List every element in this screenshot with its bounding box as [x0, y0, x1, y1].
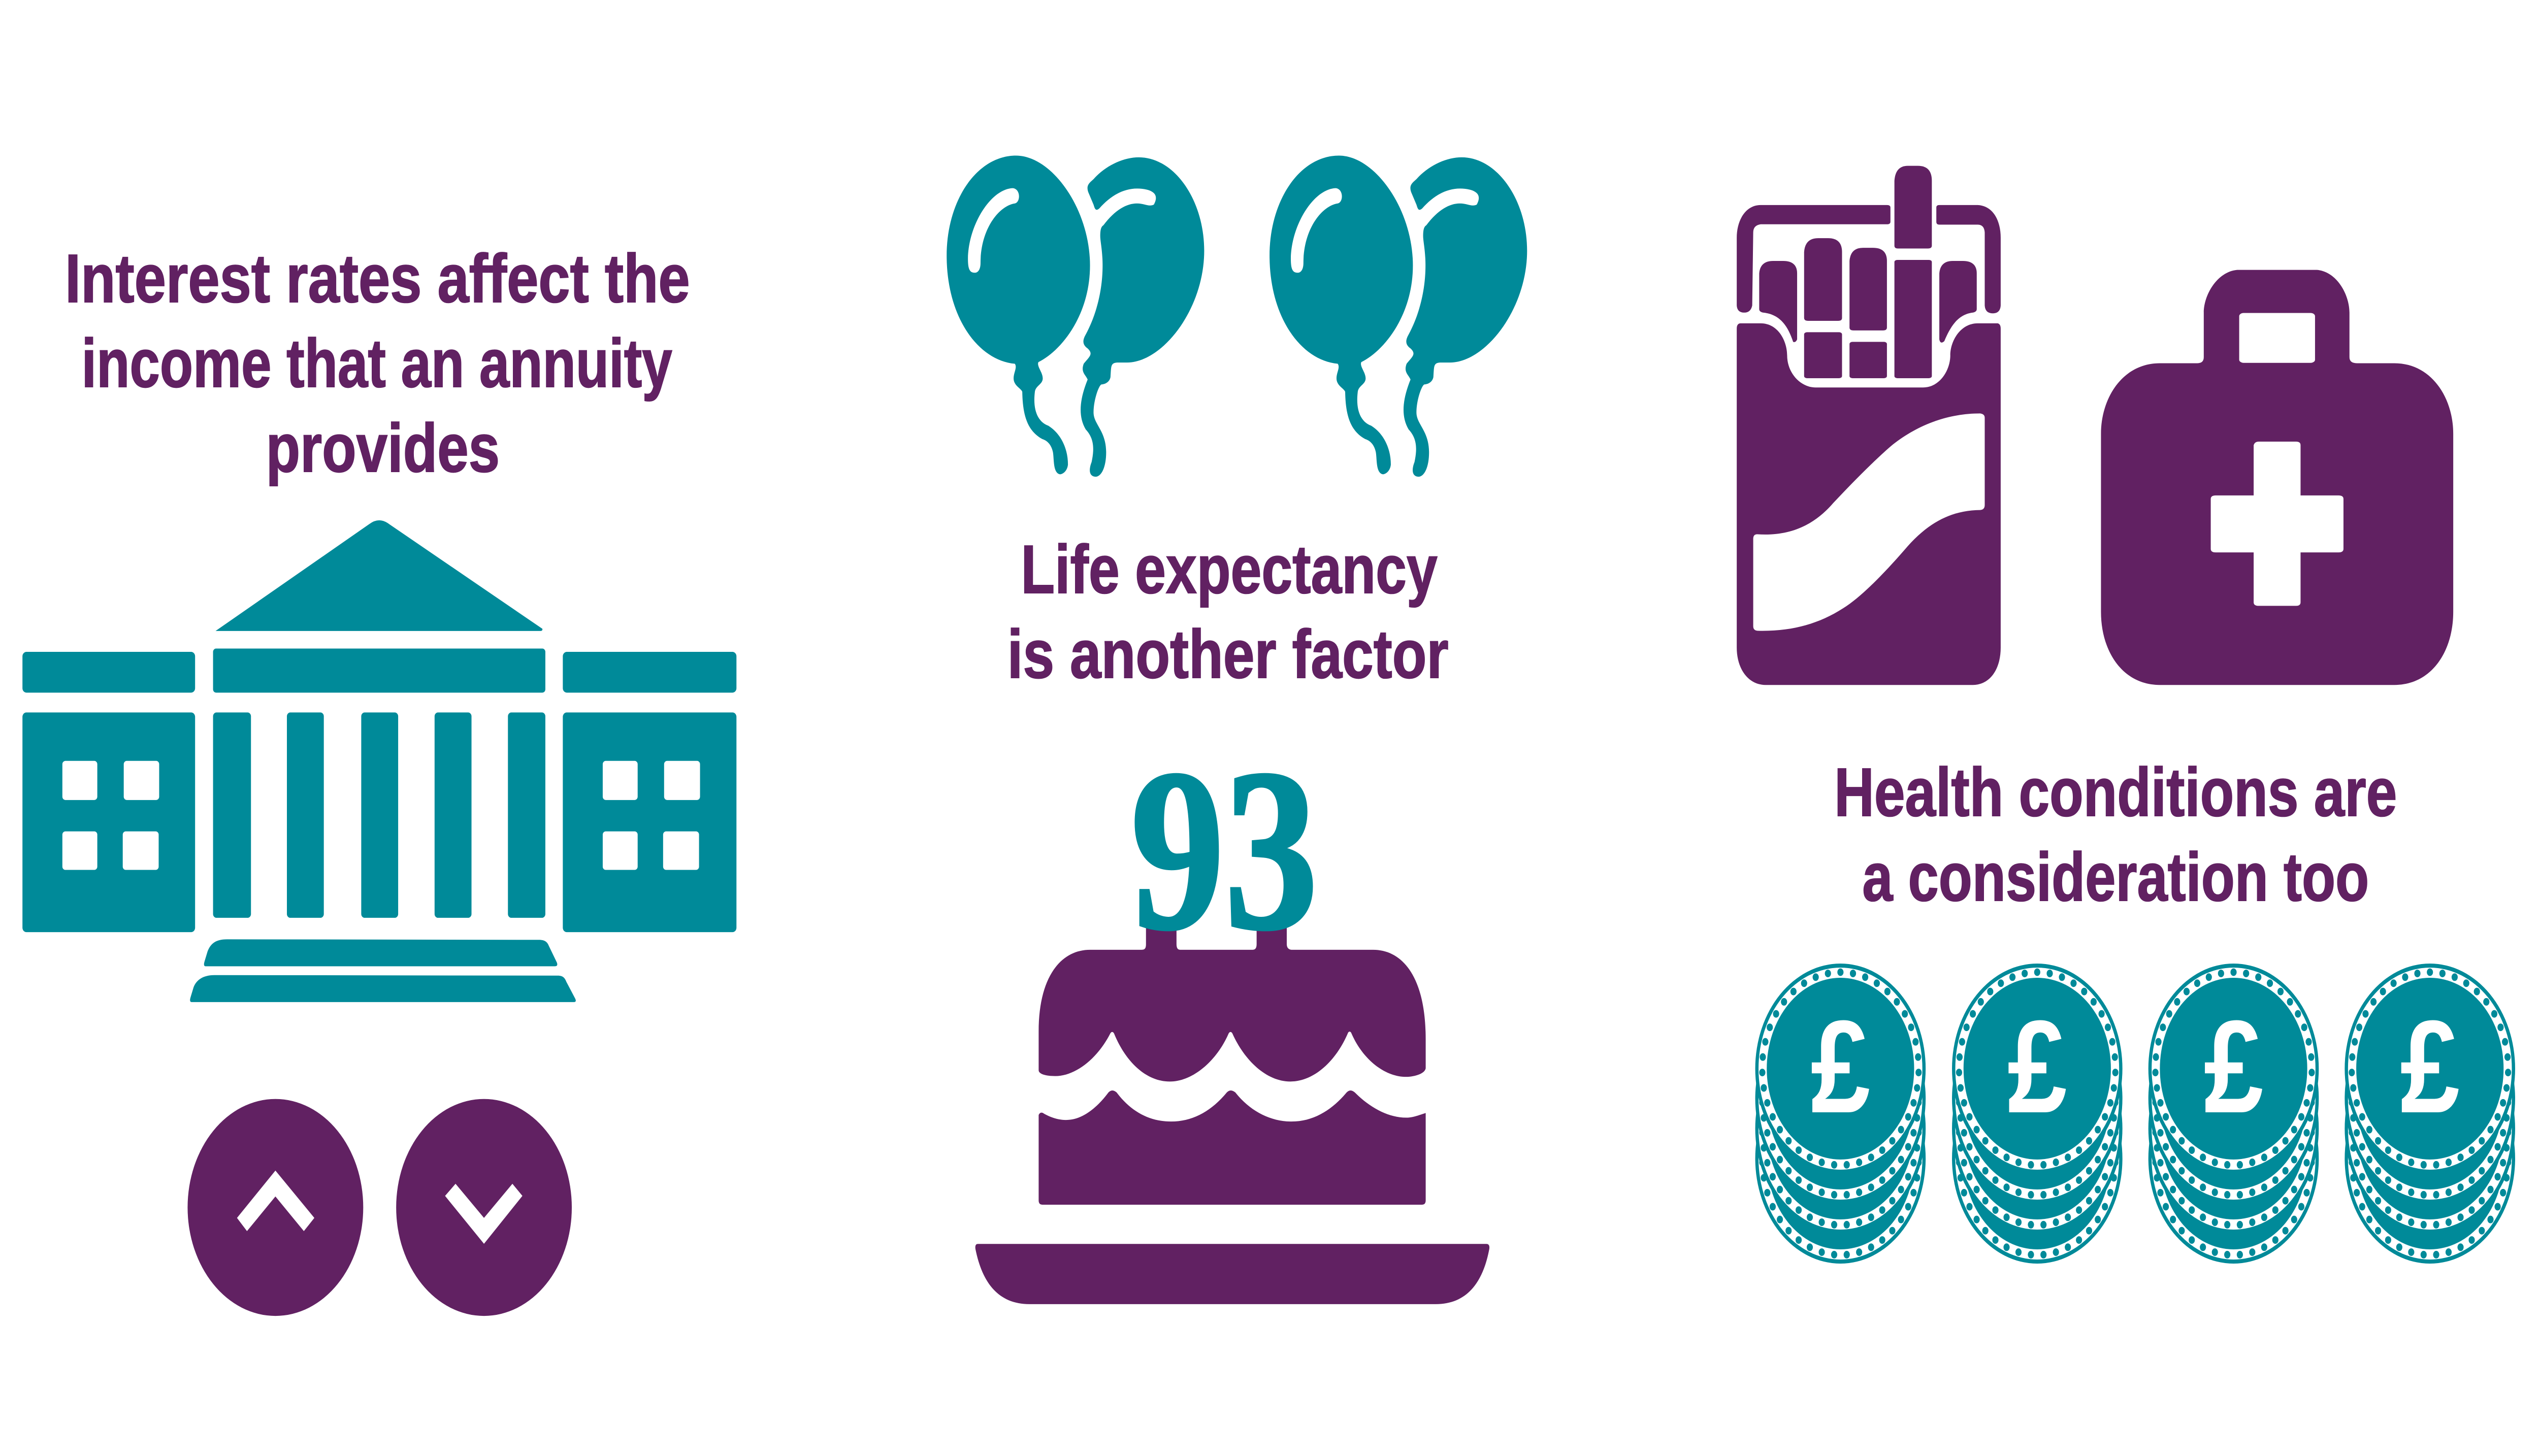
number: age 93: 93	[1131, 722, 1318, 978]
heading: health conditions: Health conditions are	[1834, 754, 2397, 831]
icon: birthday cake	[975, 915, 1489, 1304]
heading: health conditions	[1834, 754, 2397, 916]
icon: cigarette pack	[1737, 166, 2001, 685]
icon: balloons right pair	[1270, 155, 1527, 477]
icon: coin stack 1	[1755, 964, 1926, 1264]
heading: life expectancy: Life expectancy	[1021, 532, 1438, 608]
icon: coin stack 2: £	[2007, 994, 2067, 1141]
heading: life expectancy: is another factor	[1007, 616, 1449, 693]
heading: interest rates: Interest rates affect the	[65, 241, 690, 317]
icon: coin stack 2	[1952, 964, 2123, 1264]
panel: health conditions	[1737, 166, 2515, 1264]
icon: first aid kit	[2101, 270, 2453, 685]
icon: coin stack 4	[2345, 964, 2515, 1264]
heading: interest rates	[65, 241, 690, 487]
heading: interest rates: provides	[266, 410, 500, 487]
icon: coin stack 3	[2149, 964, 2319, 1264]
icon: rates down arrow	[396, 1099, 572, 1316]
panel: interest rates	[22, 241, 736, 1316]
icon: coin stack 3: £	[2204, 994, 2263, 1141]
icon: balloons left pair	[947, 155, 1204, 477]
icon: rates up arrow	[187, 1099, 363, 1316]
icon: coin stack 1: £	[1811, 994, 1870, 1141]
panel: life expectancy	[947, 155, 1527, 1304]
heading: health conditions: a consideration too	[1862, 839, 2369, 916]
icon: coin stack 4: £	[2400, 994, 2460, 1141]
heading: interest rates: income that an annuity	[82, 325, 672, 402]
heading: life expectancy	[1007, 532, 1449, 693]
icon: bank building	[22, 520, 736, 1002]
